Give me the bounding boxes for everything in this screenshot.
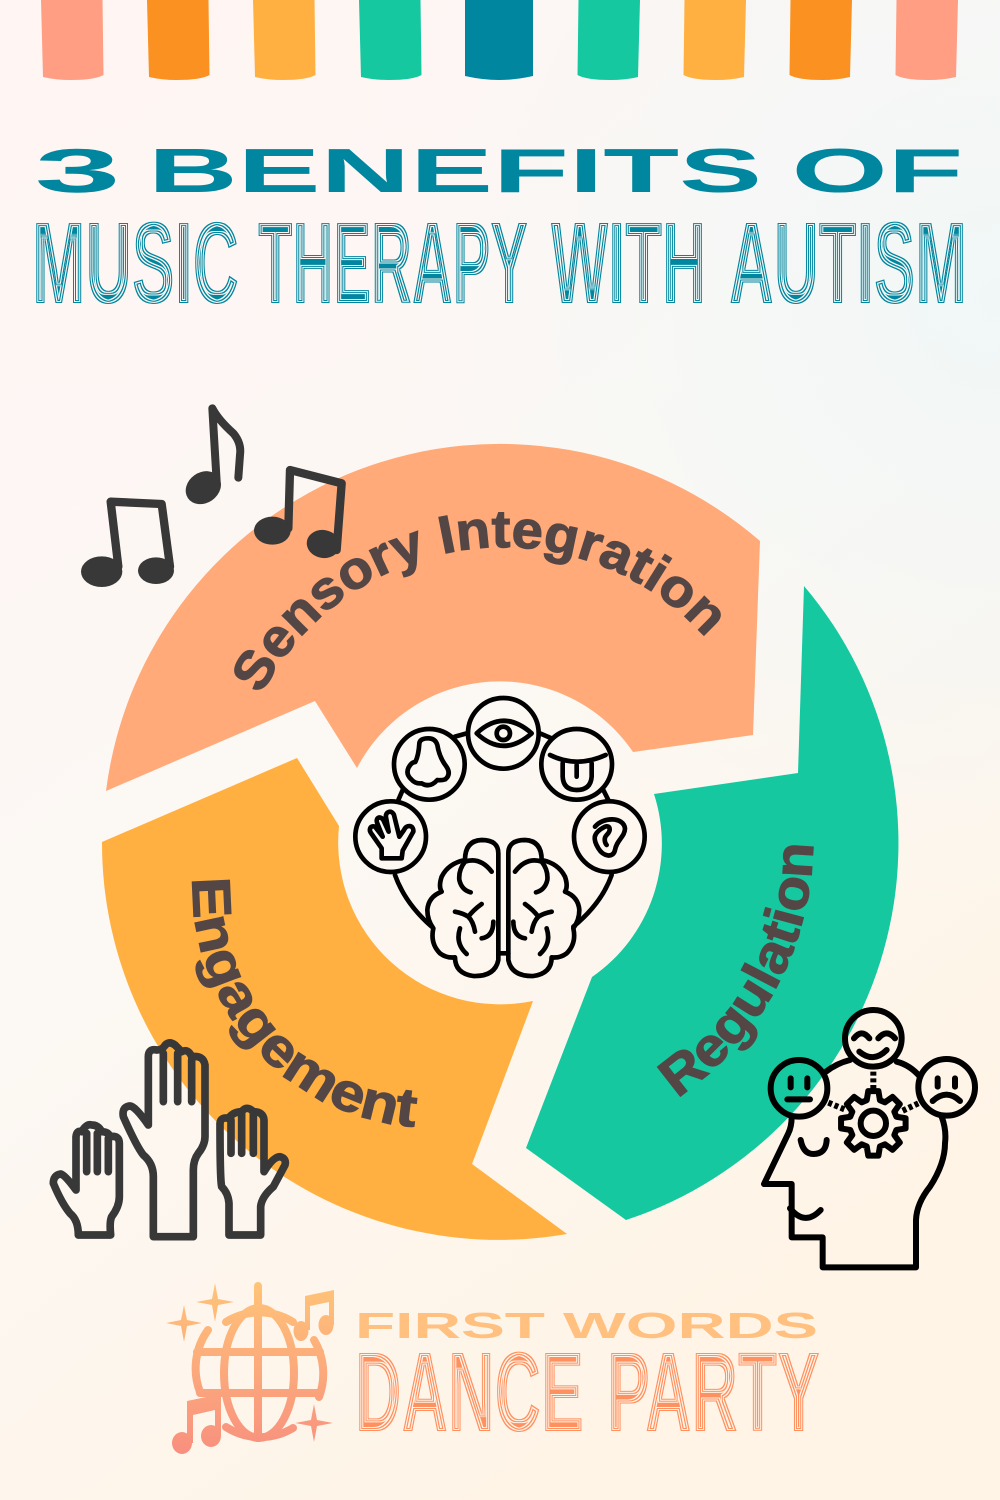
logo: first words dance party <box>166 1283 820 1455</box>
icon: raised hands <box>53 1043 285 1237</box>
title line 1: BENEFITS <box>148 137 762 206</box>
logo text: first words: FIRST <box>355 1305 545 1346</box>
icon: ear <box>574 801 645 872</box>
icon: senses and brain <box>355 698 645 976</box>
icon: beamed notes right <box>254 470 342 561</box>
icon: gear <box>828 1072 918 1156</box>
title line 1: OF <box>792 137 963 206</box>
icon: brain <box>427 840 579 976</box>
cycle diagram <box>102 444 898 1240</box>
icon: neutral face <box>771 1060 827 1117</box>
logo icon: disco globe with notes and sparkles <box>166 1283 334 1454</box>
icon: happy face <box>845 1010 902 1067</box>
icon: centre hand <box>123 1043 205 1237</box>
segment: engagement: Engagement <box>192 880 418 1128</box>
logo text: first words <box>355 1305 818 1346</box>
icon: connecting arc <box>395 733 612 927</box>
segment: sensory integration: Sensory Integration <box>234 512 721 690</box>
logo text: first words: WORDS <box>563 1305 818 1346</box>
icon: tongue <box>541 729 612 800</box>
segment: regulation: Regulation <box>656 845 814 1098</box>
icon: single note <box>179 408 240 511</box>
icon: sad face <box>918 1059 975 1116</box>
icon: right hand <box>220 1108 285 1235</box>
icon: head with emotions and gear <box>764 1010 975 1267</box>
icon: nose <box>394 729 465 800</box>
title line 2: WITH <box>551 198 706 328</box>
icon: beamed notes left <box>81 502 174 587</box>
icon: music notes <box>81 408 342 587</box>
icon: left hand <box>53 1125 119 1235</box>
title line 2: MUSIC <box>32 198 239 328</box>
logo text: dance party: DANCE <box>355 1329 584 1455</box>
title line 2 <box>32 198 967 328</box>
top decorative colour bars <box>41 0 958 80</box>
icon: head outline <box>764 1060 945 1267</box>
segment: engagement <box>102 758 567 1240</box>
title line 1 <box>35 137 963 206</box>
segment: sensory integration <box>106 444 760 791</box>
title line 2: THERAPY <box>258 198 528 328</box>
segment: regulation <box>526 586 898 1220</box>
logo text: dance party: PARTY <box>607 1329 820 1455</box>
icon: eye <box>468 698 539 769</box>
icon: hand <box>355 801 426 872</box>
title line 1: 3 <box>35 137 121 206</box>
